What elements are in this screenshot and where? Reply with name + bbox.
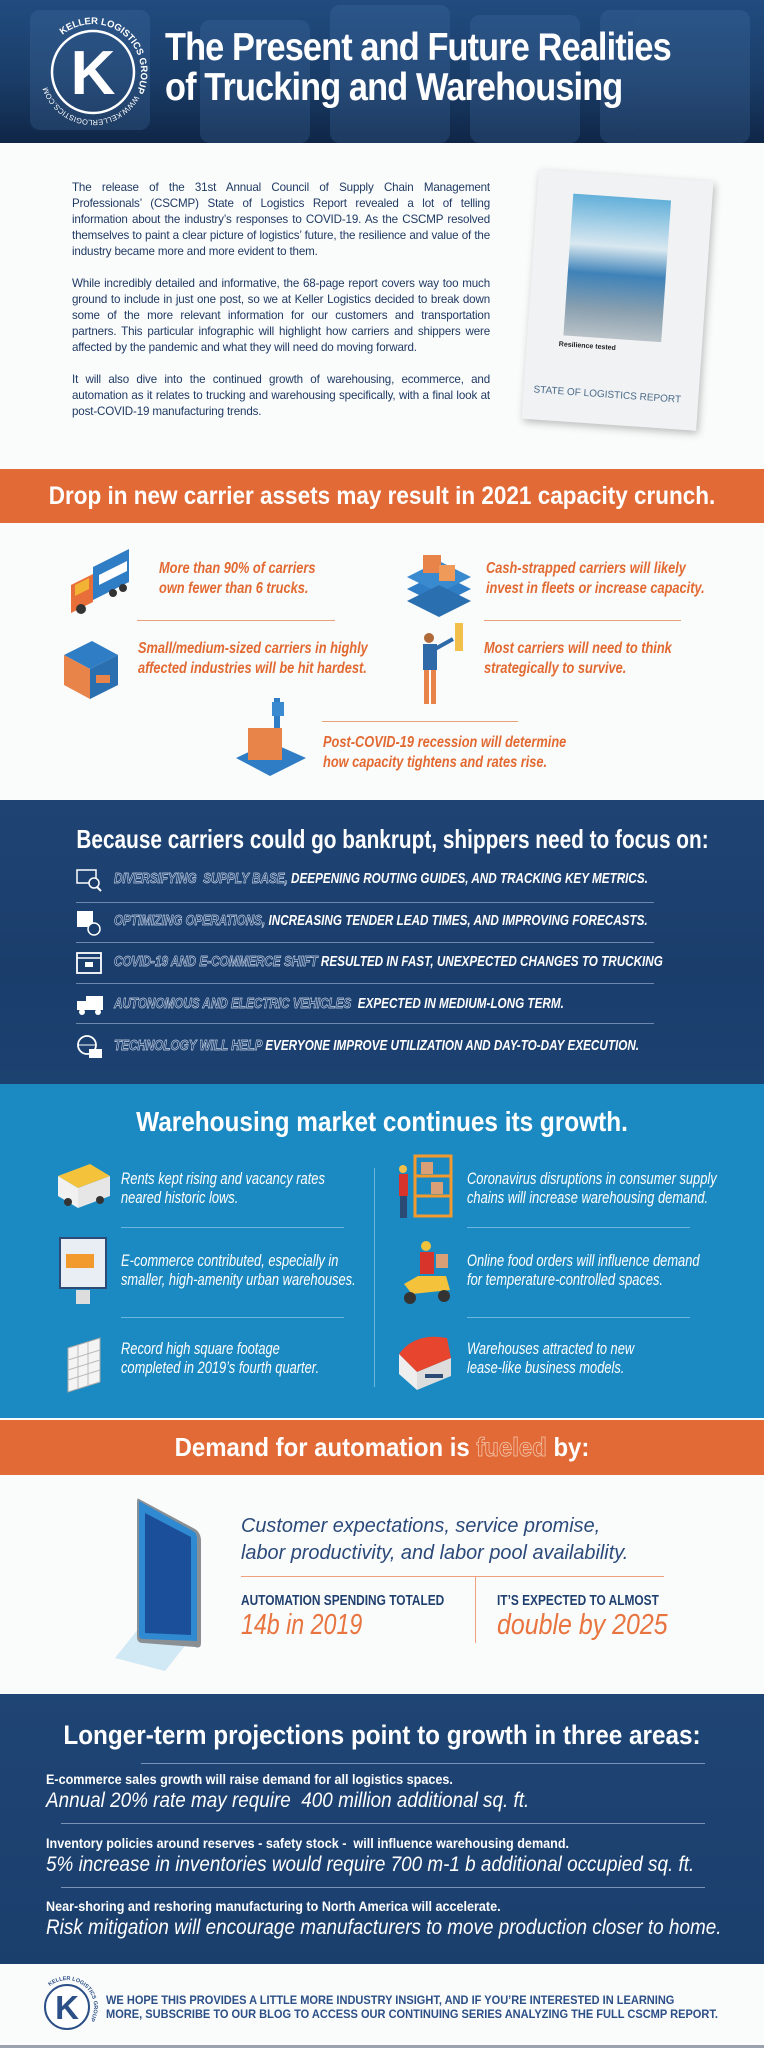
section heading: automation: Demand for automation is fueled by: <box>175 1432 589 1462</box>
text: online food orders: for temperature-controlled spaces. <box>467 1271 663 1289</box>
footer text: WE HOPE THIS PROVIDES A LITTLE MORE INDUSTRY INSIGHT, AND IF YOU’RE INTERESTED IN LEARNING <box>106 1995 674 2007</box>
panel: warehousing market <box>0 1084 764 1418</box>
text: post-covid recession <box>323 734 566 771</box>
text: cash-strapped carriers: Cash-strapped carriers will likely <box>486 560 686 577</box>
stat: double by 2025: IT’S EXPECTED TO ALMOST <box>497 1593 659 1609</box>
text: customer expectations <box>241 1514 628 1564</box>
text: e-commerce: E-commerce contributed, especially in <box>121 1252 338 1270</box>
text: coronavirus disruptions: chains will increase warehousing demand. <box>467 1189 708 1207</box>
icon: phone <box>115 1498 201 1671</box>
title: of Trucking and Warehousing <box>165 66 622 109</box>
footer text: MORE, SUBSCRIBE TO OUR BLOG TO ACCESS OUR CONTINUING SERIES ANALYZING THE FULL CSCMP REPORT. <box>106 2009 718 2021</box>
text: think strategically: Most carriers will need to think <box>484 640 672 657</box>
projection 3: Risk mitigation will encourage manufacturers to move production closer to home. <box>46 1916 721 1939</box>
text: small/medium carriers: Small/medium-sized carriers in highly <box>138 640 368 657</box>
panel: shippers focus <box>0 800 764 1084</box>
projection 2 <box>46 1835 694 1876</box>
icon: scooter delivery <box>404 1241 450 1304</box>
report cover image <box>521 169 714 431</box>
projection 1: Annual 20% rate may require 400 million additional sq. ft. <box>46 1789 529 1812</box>
logo: KELLER LOGISTICS GROUP <box>59 17 148 94</box>
logo: WWW.KELLERLOGISTICS.COM <box>42 87 140 126</box>
text: small/medium carriers <box>138 640 368 677</box>
footer text <box>106 1994 718 2022</box>
projection 1 <box>45 1771 529 1812</box>
stat: 14b in 2019 <box>241 1593 444 1641</box>
text: cash-strapped carriers: invest in fleets or increase capacity. <box>486 580 705 597</box>
icon: truck <box>71 549 129 614</box>
section heading: automation <box>0 1420 764 1475</box>
icon: calendar <box>68 1337 100 1393</box>
projection 1: E-commerce sales growth will raise demand for all logistics spaces. <box>46 1771 453 1787</box>
text: carriers own fewer trucks <box>159 560 316 597</box>
icon: shelves worker <box>399 1154 452 1218</box>
intro text: The release of the 31st Annual Council of Supply Chain Management Professionals’ (CSCMP) State of Logistics Report revealed a lot of telling information about the industry’s responses to COVID-19. As the CSCMP resolved themselves to paint a clear picture of logistics’ future, the resilience and value of the industry became more and more evident to them. <box>72 181 490 258</box>
text: think strategically <box>484 640 672 677</box>
panel: automation <box>115 1498 668 1671</box>
text: online food orders <box>467 1252 700 1289</box>
item 5 <box>77 1035 638 1058</box>
intro text <box>72 181 490 418</box>
stat: double by 2025: double by 2025 <box>497 1609 668 1641</box>
intro text: It will also dive into the continued growth of warehousing, ecommerce, and automation as it relates to trucking and warehousing specifically, with a final look at post-COVID-19 manufacturing trends. <box>72 373 490 418</box>
projection 3: Near-shoring and reshoring manufacturing to North America will accelerate. <box>46 1898 501 1914</box>
intro text: While incredibly detailed and informative, the 68-page report covers way too much ground to include in just one post, so we at Keller Logistics decided to break down some of the more relevant information for our customers and transportation partners. This particular infographic will highlight how carriers and shippers were affected by the pandemic and what they will need do moving forward. <box>72 277 490 354</box>
report cover image: Resilience tested <box>559 341 616 352</box>
text: rents: neared historic lows. <box>121 1189 238 1207</box>
text: rents <box>121 1170 325 1207</box>
text: lease-like models <box>467 1340 635 1377</box>
projection 2: Inventory policies around reserves - safety stock - will influence warehousing demand. <box>46 1835 569 1851</box>
stat: double by 2025 <box>497 1593 668 1641</box>
icon: computer order <box>59 1237 107 1304</box>
text: online food orders: Online food orders will influence demand <box>467 1252 700 1270</box>
icon: warehouse building <box>399 1336 451 1390</box>
item 1 <box>76 869 647 892</box>
heading: Longer-term projections point to growth in three areas: <box>63 1720 701 1750</box>
icon: van <box>58 1164 110 1208</box>
title <box>165 26 671 109</box>
heading: Warehousing market continues its growth. <box>136 1106 628 1137</box>
text: record square footage: completed in 2019’s fourth quarter. <box>121 1359 319 1377</box>
footer logo: KELLER LOGISTICS GROUP <box>48 1976 98 2022</box>
section heading: carrier assets: Drop in new carrier assets may result in 2021 capacity crunch. <box>49 482 715 510</box>
icon: person at board <box>423 623 463 704</box>
stat: 14b in 2019: AUTOMATION SPENDING TOTALED <box>241 1593 444 1609</box>
text: record square footage <box>121 1340 319 1377</box>
heading: Because carriers could go bankrupt, shippers need to focus on: <box>76 824 709 854</box>
text: record square footage: Record high square footage <box>121 1340 280 1358</box>
text: cash-strapped carriers <box>486 560 705 597</box>
text: lease-like models: Warehouses attracted to new <box>467 1340 634 1358</box>
section heading: carrier assets <box>0 469 764 523</box>
text: carriers own fewer trucks: More than 90% of carriers <box>159 560 316 577</box>
text: rents: Rents kept rising and vacancy rates <box>121 1170 325 1188</box>
footer <box>0 1964 764 2048</box>
panel: carrier points <box>64 549 705 776</box>
icon: warehouse box <box>64 641 118 699</box>
stat: 14b in 2019: 14b in 2019 <box>241 1609 362 1641</box>
text: post-covid recession: Post-COVID-19 recession will determine <box>323 734 566 751</box>
text: carriers own fewer trucks: own fewer than 6 trucks. <box>159 580 308 597</box>
icon: scale with box <box>236 698 306 776</box>
text: e-commerce: smaller, high-amenity urban warehouses. <box>121 1271 356 1289</box>
text: customer expectations: labor productivity, and labor pool availability. <box>241 1541 628 1564</box>
text: post-covid recession: how capacity tightens and rates rise. <box>323 754 547 771</box>
report cover image: STATE OF LOGISTICS REPORT <box>533 384 681 406</box>
item 2 <box>77 911 647 936</box>
text: customer expectations: Customer expectations, service promise, <box>241 1514 600 1537</box>
icon: shelf with boxes <box>407 555 471 617</box>
text: coronavirus disruptions: Coronavirus disruptions in consumer supply <box>467 1170 717 1188</box>
text: e-commerce <box>121 1252 356 1289</box>
text: lease-like models: lease-like business models. <box>467 1359 624 1377</box>
projection 3 <box>46 1898 721 1939</box>
header banner <box>0 0 764 143</box>
footer logo: K <box>55 1989 79 2026</box>
text: small/medium carriers: affected industries will be hit hardest. <box>138 660 367 677</box>
panel: longer-term projections <box>0 1694 764 1964</box>
text: think strategically: strategically to survive. <box>484 660 626 677</box>
projection 2: 5% increase in inventories would require 700 m-1 b additional occupied sq. ft. <box>46 1853 694 1876</box>
title: The Present and Future Realities <box>165 26 671 69</box>
text: coronavirus disruptions <box>467 1170 718 1207</box>
logo: K <box>71 39 116 108</box>
logo <box>42 17 148 126</box>
